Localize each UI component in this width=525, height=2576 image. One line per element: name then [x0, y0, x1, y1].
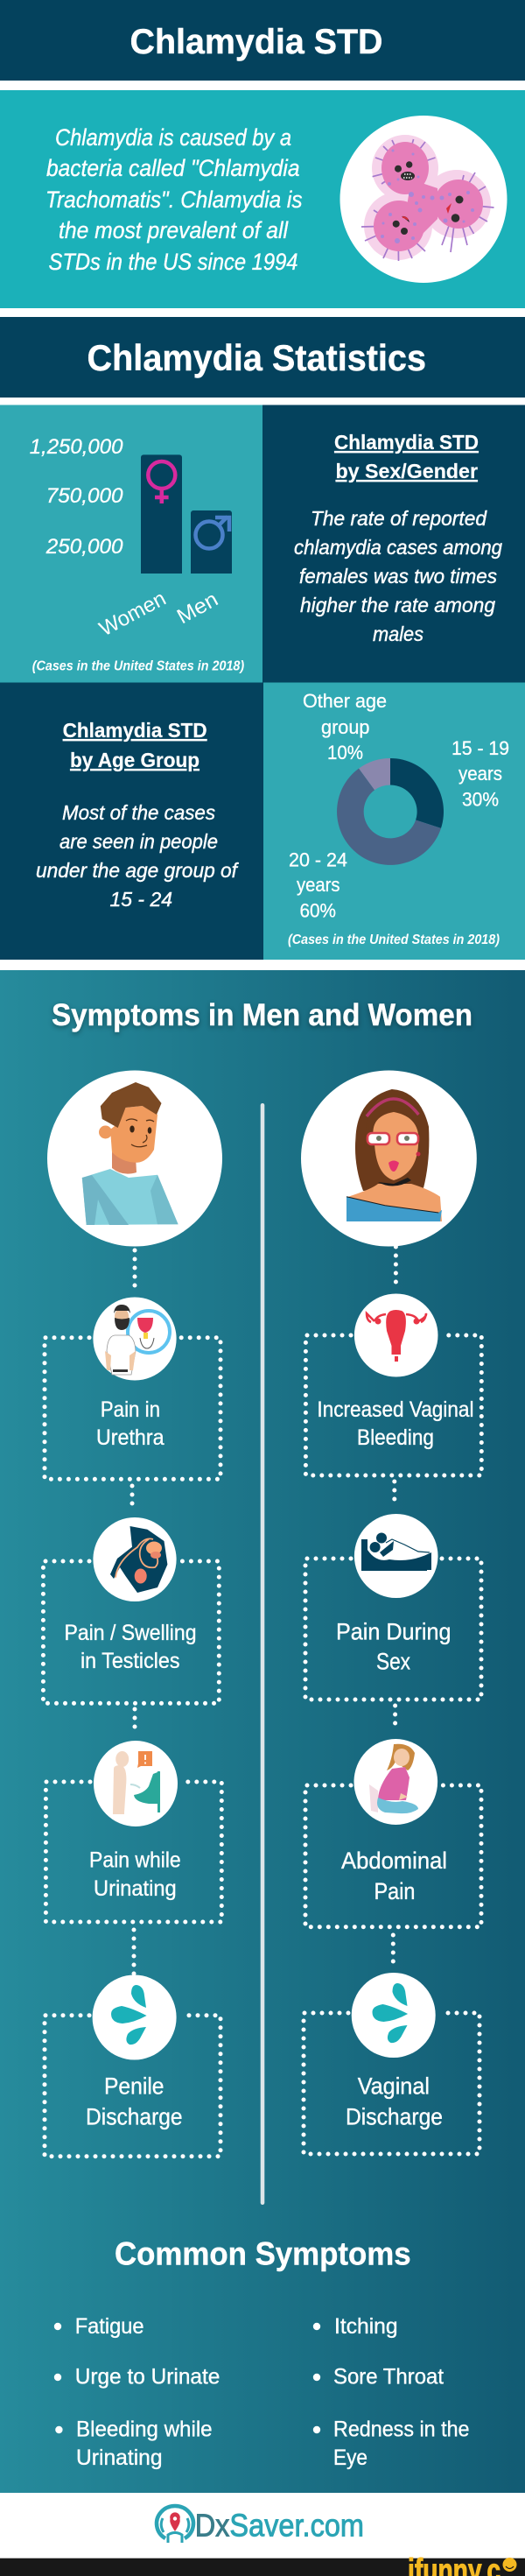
column: men [43, 1070, 222, 2157]
panel: by age group text: Most of the cases [62, 801, 215, 824]
bar: men [191, 510, 232, 574]
bar labels: Men [173, 588, 222, 629]
label: penile discharge: Penile [104, 2073, 164, 2100]
panel: by age group text: Chlamydia STD [63, 719, 207, 742]
list: common symptoms right: Eye [333, 2446, 368, 2470]
label: increased vaginal bleeding [317, 1397, 474, 1450]
label: vaginal discharge: Vaginal [358, 2073, 430, 2100]
title banner: Chlamydia STD [130, 23, 383, 61]
panel: donut chart age groups [263, 683, 525, 960]
divider line [261, 1103, 264, 2205]
label: vaginal discharge [346, 2073, 443, 2130]
icon: increased vaginal bleeding [354, 1294, 438, 1376]
title banner [0, 0, 525, 81]
list: common symptoms right: Sore Throat [333, 2365, 444, 2389]
connectors and dotted boxes [43, 1250, 221, 2157]
heading banner: statistics [0, 317, 525, 398]
label: abdominal pain: Abdominal [341, 1848, 447, 1874]
donut chart [337, 758, 444, 865]
panel: by age group text: are seen in people [60, 830, 218, 853]
panel: introduction [0, 90, 525, 308]
panel: by sex/gender text: males [373, 623, 424, 645]
watermark band: ifunny [0, 2552, 525, 2576]
panel: by sex/gender text: females was two times [299, 565, 497, 588]
caption: (Cases in the United States in 2018) [288, 933, 500, 947]
label: other age group: 10% [327, 742, 363, 764]
label: 15-19 years: years [458, 763, 502, 785]
intro text: Chlamydia is caused by a [55, 124, 291, 151]
label: penile discharge: Discharge [86, 2104, 183, 2130]
bar: women [141, 454, 182, 574]
icon: pain in urethra [93, 1298, 177, 1380]
heading banner: statistics: Chlamydia Statistics [88, 337, 426, 378]
label: 20-24 years: 60% [299, 900, 336, 921]
label: other age group [303, 690, 387, 764]
axis labels: 250,000 [46, 535, 123, 559]
label: pain during sex: Pain During [336, 1619, 452, 1645]
icon: pain while urinating [94, 1741, 178, 1826]
intro text: STDs in the US since 1994 [49, 249, 298, 275]
label: other age group: Other age [303, 690, 387, 712]
label: pain during sex: Sex [376, 1649, 410, 1675]
label: pain in urethra [96, 1397, 164, 1450]
bar labels [95, 587, 222, 641]
axis labels [30, 435, 123, 559]
label: abdominal pain: Pain [374, 1878, 415, 1904]
panel: by sex/gender text: chlamydia cases among [294, 536, 502, 559]
list: common symptoms left: Urinating [76, 2446, 163, 2470]
label: pain while urinating [89, 1848, 181, 1901]
illustration: man [47, 1070, 222, 1247]
label: 20-24 years: years [297, 874, 340, 896]
icon: penile discharge [93, 1975, 177, 2059]
bar labels: Women [95, 587, 170, 641]
panel: by age group text [0, 683, 263, 960]
panel: symptoms background [0, 970, 525, 2493]
intro text: Trachomatis". Chlamydia is [46, 187, 303, 213]
label: 15-19 years: 15 - 19 [452, 737, 509, 759]
list: common symptoms right: Itching [334, 2314, 398, 2339]
label: abdominal pain [341, 1848, 447, 1904]
intro text: bacteria called "Chlamydia [46, 155, 299, 181]
label: vaginal discharge: Discharge [346, 2104, 443, 2130]
panel: by age group text: 15 - 24 [110, 888, 172, 911]
icon: vaginal discharge [352, 1973, 436, 2058]
heading: common symptoms: Common Symptoms [115, 2236, 411, 2272]
list: common symptoms left: Bleeding while [76, 2418, 213, 2442]
label: pain / swelling in testicles: Pain / Swelling [65, 1621, 196, 1645]
label: pain during sex [336, 1619, 452, 1675]
label: pain in urethra: Urethra [96, 1425, 164, 1450]
label: 15-19 years: 30% [462, 788, 499, 811]
label: 15-19 years [452, 737, 509, 811]
connectors and dotted boxes [304, 1247, 481, 2154]
panel: by age group text: by Age Group [70, 749, 200, 771]
panel: by sex/gender text: The rate of reported [311, 507, 487, 530]
label: increased vaginal bleeding: Increased Vaginal [317, 1397, 474, 1422]
label: other age group: group [321, 716, 369, 738]
intro text: the most prevalent of all [59, 217, 289, 243]
list: common symptoms left: Urge to Urinate [75, 2365, 220, 2389]
panel: by sex/gender text [262, 405, 525, 683]
heading: symptoms in men and women: Symptoms in Men and Women [52, 998, 472, 1032]
axis labels: 1,250,000 [30, 435, 123, 459]
panel: by sex/gender text: higher the rate among [300, 594, 495, 616]
logo: DxSaver.com: DxSaver.com [195, 2508, 364, 2544]
label: pain while urinating: Pain while [89, 1848, 181, 1873]
label: pain / swelling in testicles: in Testicles [80, 1649, 180, 1673]
icon: chlamydia bacteria [340, 116, 508, 283]
column: women [301, 1070, 481, 2154]
caption: (Cases in the United States in 2018) [32, 658, 244, 674]
panel: by sex/gender text: by Sex/Gender [336, 460, 478, 482]
label: increased vaginal bleeding: Bleeding [357, 1425, 434, 1450]
label: penile discharge [86, 2073, 183, 2130]
panel: by age group text: under the age group of [36, 859, 240, 882]
label: pain / swelling in testicles [65, 1621, 196, 1673]
panel: bar chart cases by gender [0, 405, 262, 683]
list: common symptoms left: Fatigue [75, 2314, 144, 2339]
label: 20-24 years [289, 849, 347, 921]
list: common symptoms right: Redness in the [333, 2418, 469, 2442]
panel: by sex/gender text: Chlamydia STD [334, 431, 479, 454]
axis labels: 750,000 [46, 484, 123, 508]
icon: abdominal pain [354, 1739, 438, 1825]
list: common symptoms right [313, 2314, 469, 2470]
icon: pain and swelling in testicles [93, 1517, 177, 1601]
intro text [46, 124, 303, 275]
label: pain in urethra: Pain in [101, 1397, 160, 1422]
list: common symptoms left [54, 2314, 220, 2470]
icon: pain during sex [354, 1514, 438, 1598]
illustration: woman [301, 1070, 477, 1247]
label: pain while urinating: Urinating [94, 1876, 177, 1901]
label: 20-24 years: 20 - 24 [289, 849, 347, 870]
